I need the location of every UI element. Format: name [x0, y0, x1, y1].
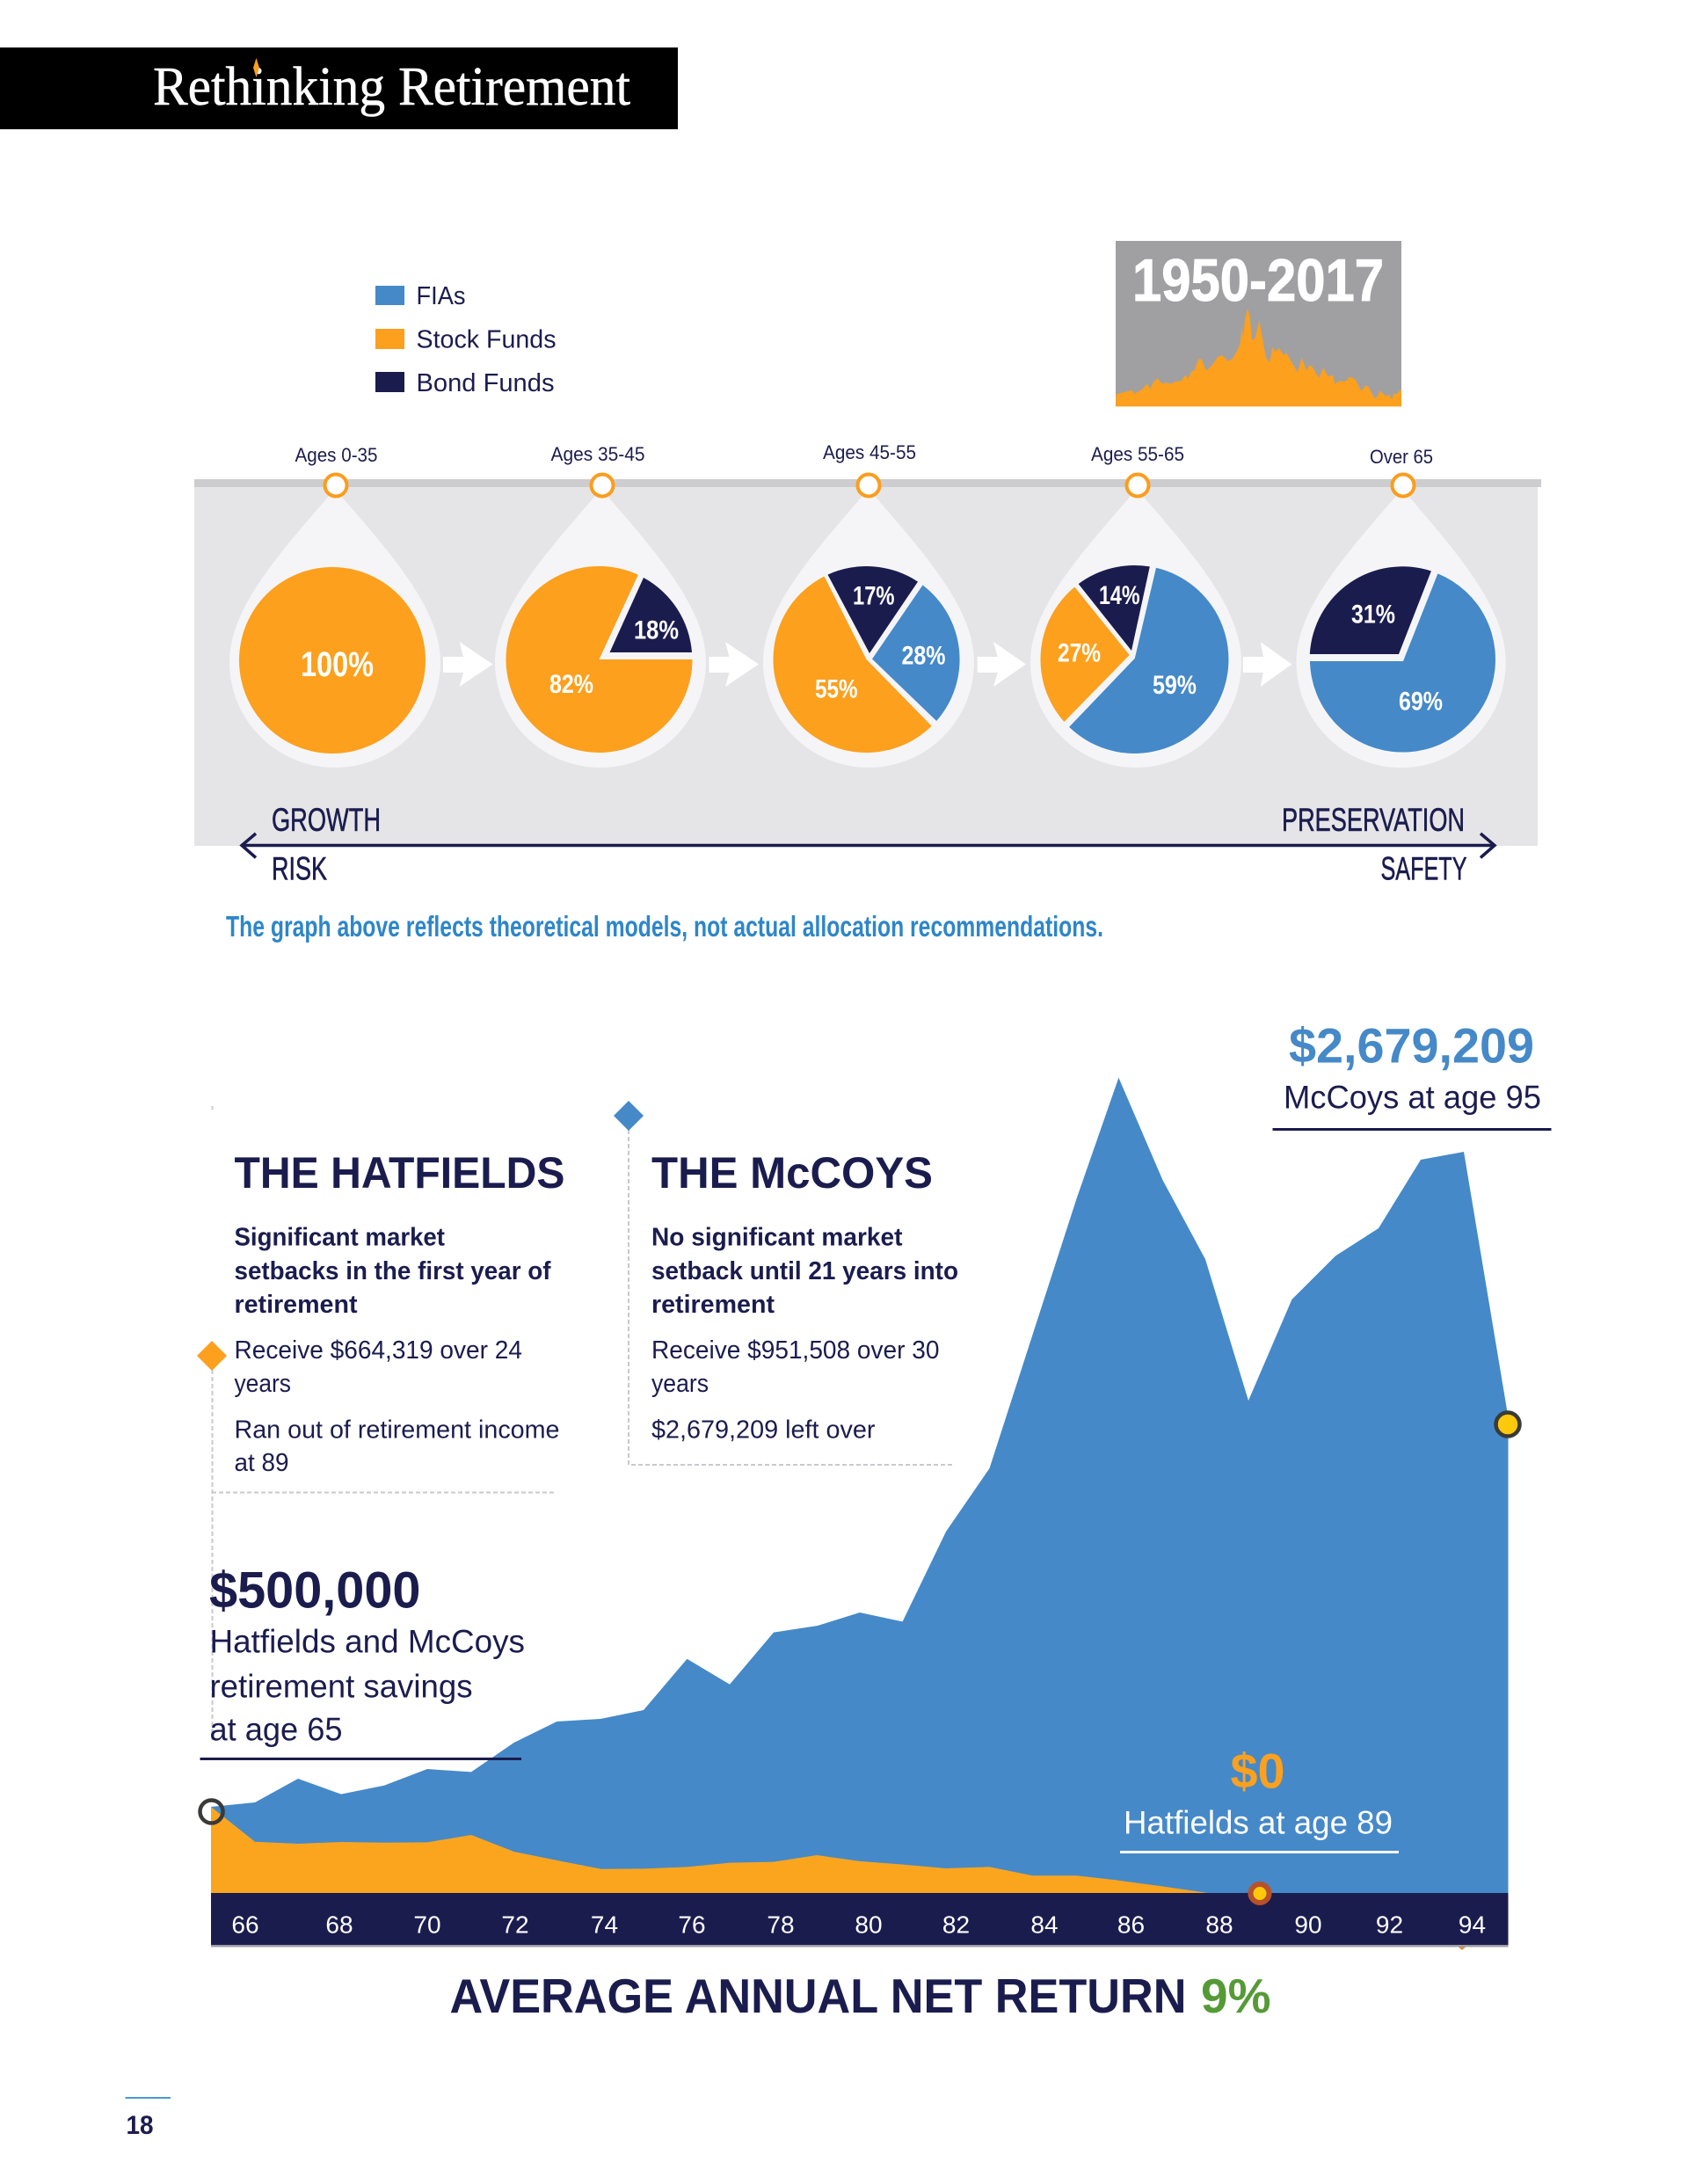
area chart: portfolio values by age [200, 1078, 1519, 1950]
marker: start [200, 1801, 223, 1824]
callout: starting savings: at age 65 [209, 1711, 343, 1748]
summary: retirement [234, 1291, 358, 1319]
age labels: Ages 35-45 [550, 443, 645, 465]
arrow [709, 642, 759, 687]
callout: McCoys final value: McCoys at age 95 [1284, 1080, 1541, 1115]
age labels [295, 441, 1433, 468]
age axis: 90 [1294, 1911, 1322, 1938]
blue area: McCoys [211, 1078, 1509, 1894]
age axis: 82 [942, 1911, 970, 1938]
inset chart: 1950-2017: 1950-2017 [1132, 247, 1384, 314]
pie: ages 35-45: 82% [549, 670, 593, 699]
scale labels: PRESERVATION [1282, 802, 1465, 838]
scale labels: RISK [272, 851, 327, 886]
age axis: 84 [1030, 1911, 1059, 1938]
age axis: 66 [231, 1911, 259, 1938]
pie: over 65: 31% [1351, 600, 1395, 630]
page number: 18 [127, 2111, 153, 2140]
pie: ages 35-45: 18% [634, 615, 679, 645]
orange area: Hatfields [211, 1807, 1211, 1894]
arrow [443, 642, 492, 687]
icon: flame over the i [253, 58, 259, 77]
pie: ages 45-55: 55% [815, 675, 858, 703]
callout: Hatfields zero: Hatfields at age 89 [1124, 1804, 1393, 1841]
callout: starting savings: retirement savings [209, 1669, 473, 1704]
details [234, 1336, 559, 1477]
pie: over 65: 69% [1399, 688, 1443, 716]
scale labels: SAFETY [1380, 851, 1466, 886]
age labels: Ages 0-35 [295, 444, 378, 466]
pie: ages 0-35 [229, 475, 440, 768]
chart caption: 9% [1201, 1969, 1271, 2023]
details: Receive $951,508 over 30 [651, 1336, 939, 1365]
age axis: 78 [767, 1911, 795, 1938]
age axis: 86 [1117, 1911, 1145, 1938]
icon: blue diamond [614, 1101, 644, 1131]
age axis: 70 [413, 1911, 441, 1938]
pie: over 65 [1296, 475, 1506, 768]
scale labels: GROWTH [272, 802, 381, 838]
pie: ages 55-65: 14% [1099, 581, 1139, 610]
age axis: 92 [1376, 1911, 1403, 1938]
disclaimer note: The graph above reflects theoretical models, not actual allocation recommendations. [226, 910, 1103, 943]
details: $2,679,209 left over [651, 1416, 876, 1444]
summary [234, 1224, 551, 1319]
age axis [211, 1893, 1509, 1950]
callout: starting savings: Hatfields and McCoys [209, 1623, 525, 1660]
age labels: Ages 45-55 [823, 441, 916, 463]
pie: ages 45-55: 28% [902, 642, 946, 670]
legend: Bond Funds [417, 369, 554, 397]
age axis: 80 [855, 1911, 883, 1938]
legend [375, 282, 556, 397]
legend: FIAs [417, 282, 466, 310]
details: at 89 [234, 1449, 288, 1477]
marker: Hatfields zero [1250, 1884, 1270, 1903]
legend: Stock Funds [417, 325, 556, 353]
panel: the Hatfields [197, 1106, 564, 1741]
summary: setback until 21 years into [651, 1257, 958, 1285]
arrow: growth/risk to preservation/safety scale [242, 834, 1495, 858]
marker: McCoys end [1496, 1412, 1519, 1437]
pie: ages 55-65: 59% [1153, 671, 1197, 700]
chart caption: AVERAGE ANNUAL NET RETURN [450, 1969, 1187, 2023]
heading: THE McCOYS [651, 1148, 933, 1198]
details [651, 1336, 939, 1444]
summary [651, 1224, 958, 1319]
arrow [1243, 642, 1291, 687]
callout: McCoys final value: $2,679,209 [1289, 1018, 1534, 1073]
callout: Hatfields zero: $0 [1231, 1743, 1285, 1799]
panel: allocation timeline [194, 441, 1541, 886]
summary: retirement [651, 1291, 775, 1319]
pie: ages 45-55: 17% [853, 582, 895, 610]
age axis: 88 [1205, 1911, 1233, 1938]
details: years [651, 1370, 709, 1398]
age axis: 94 [1459, 1911, 1486, 1938]
callout: McCoys final value [1273, 1018, 1551, 1131]
header banner [0, 47, 678, 129]
summary: No significant market [651, 1224, 903, 1252]
age labels: Ages 55-65 [1091, 443, 1184, 465]
panel: the McCoys [614, 1101, 958, 1465]
scale labels [272, 802, 1466, 886]
icon: orange diamond [197, 1341, 227, 1371]
age axis: 72 [501, 1911, 529, 1938]
age labels: Over 65 [1370, 446, 1433, 468]
details: years [234, 1370, 291, 1398]
age axis: 68 [325, 1911, 353, 1938]
pie: ages 35-45 [495, 475, 706, 768]
summary: setbacks in the first year of [234, 1257, 551, 1285]
callout: starting savings: $500,000 [209, 1562, 420, 1620]
summary: Significant market [234, 1224, 445, 1252]
details: Ran out of retirement income [234, 1416, 559, 1444]
details: Receive $664,319 over 24 [234, 1336, 522, 1365]
age axis: 76 [678, 1911, 706, 1938]
callout: starting savings [200, 1562, 525, 1760]
age axis: 74 [591, 1911, 618, 1938]
arrow [978, 642, 1026, 687]
pie: ages 45-55 [763, 475, 974, 768]
pie: ages 0-35: 100% [301, 645, 374, 684]
heading: THE HATFIELDS [234, 1148, 564, 1198]
callout: Hatfields zero [1120, 1743, 1399, 1853]
pie: ages 55-65: 27% [1058, 638, 1101, 668]
pie: ages 55-65 [1030, 475, 1241, 768]
title: Rethinking Retirement [153, 57, 630, 117]
inset chart: 1950-2017 [1116, 241, 1401, 406]
page number [125, 2097, 171, 2140]
